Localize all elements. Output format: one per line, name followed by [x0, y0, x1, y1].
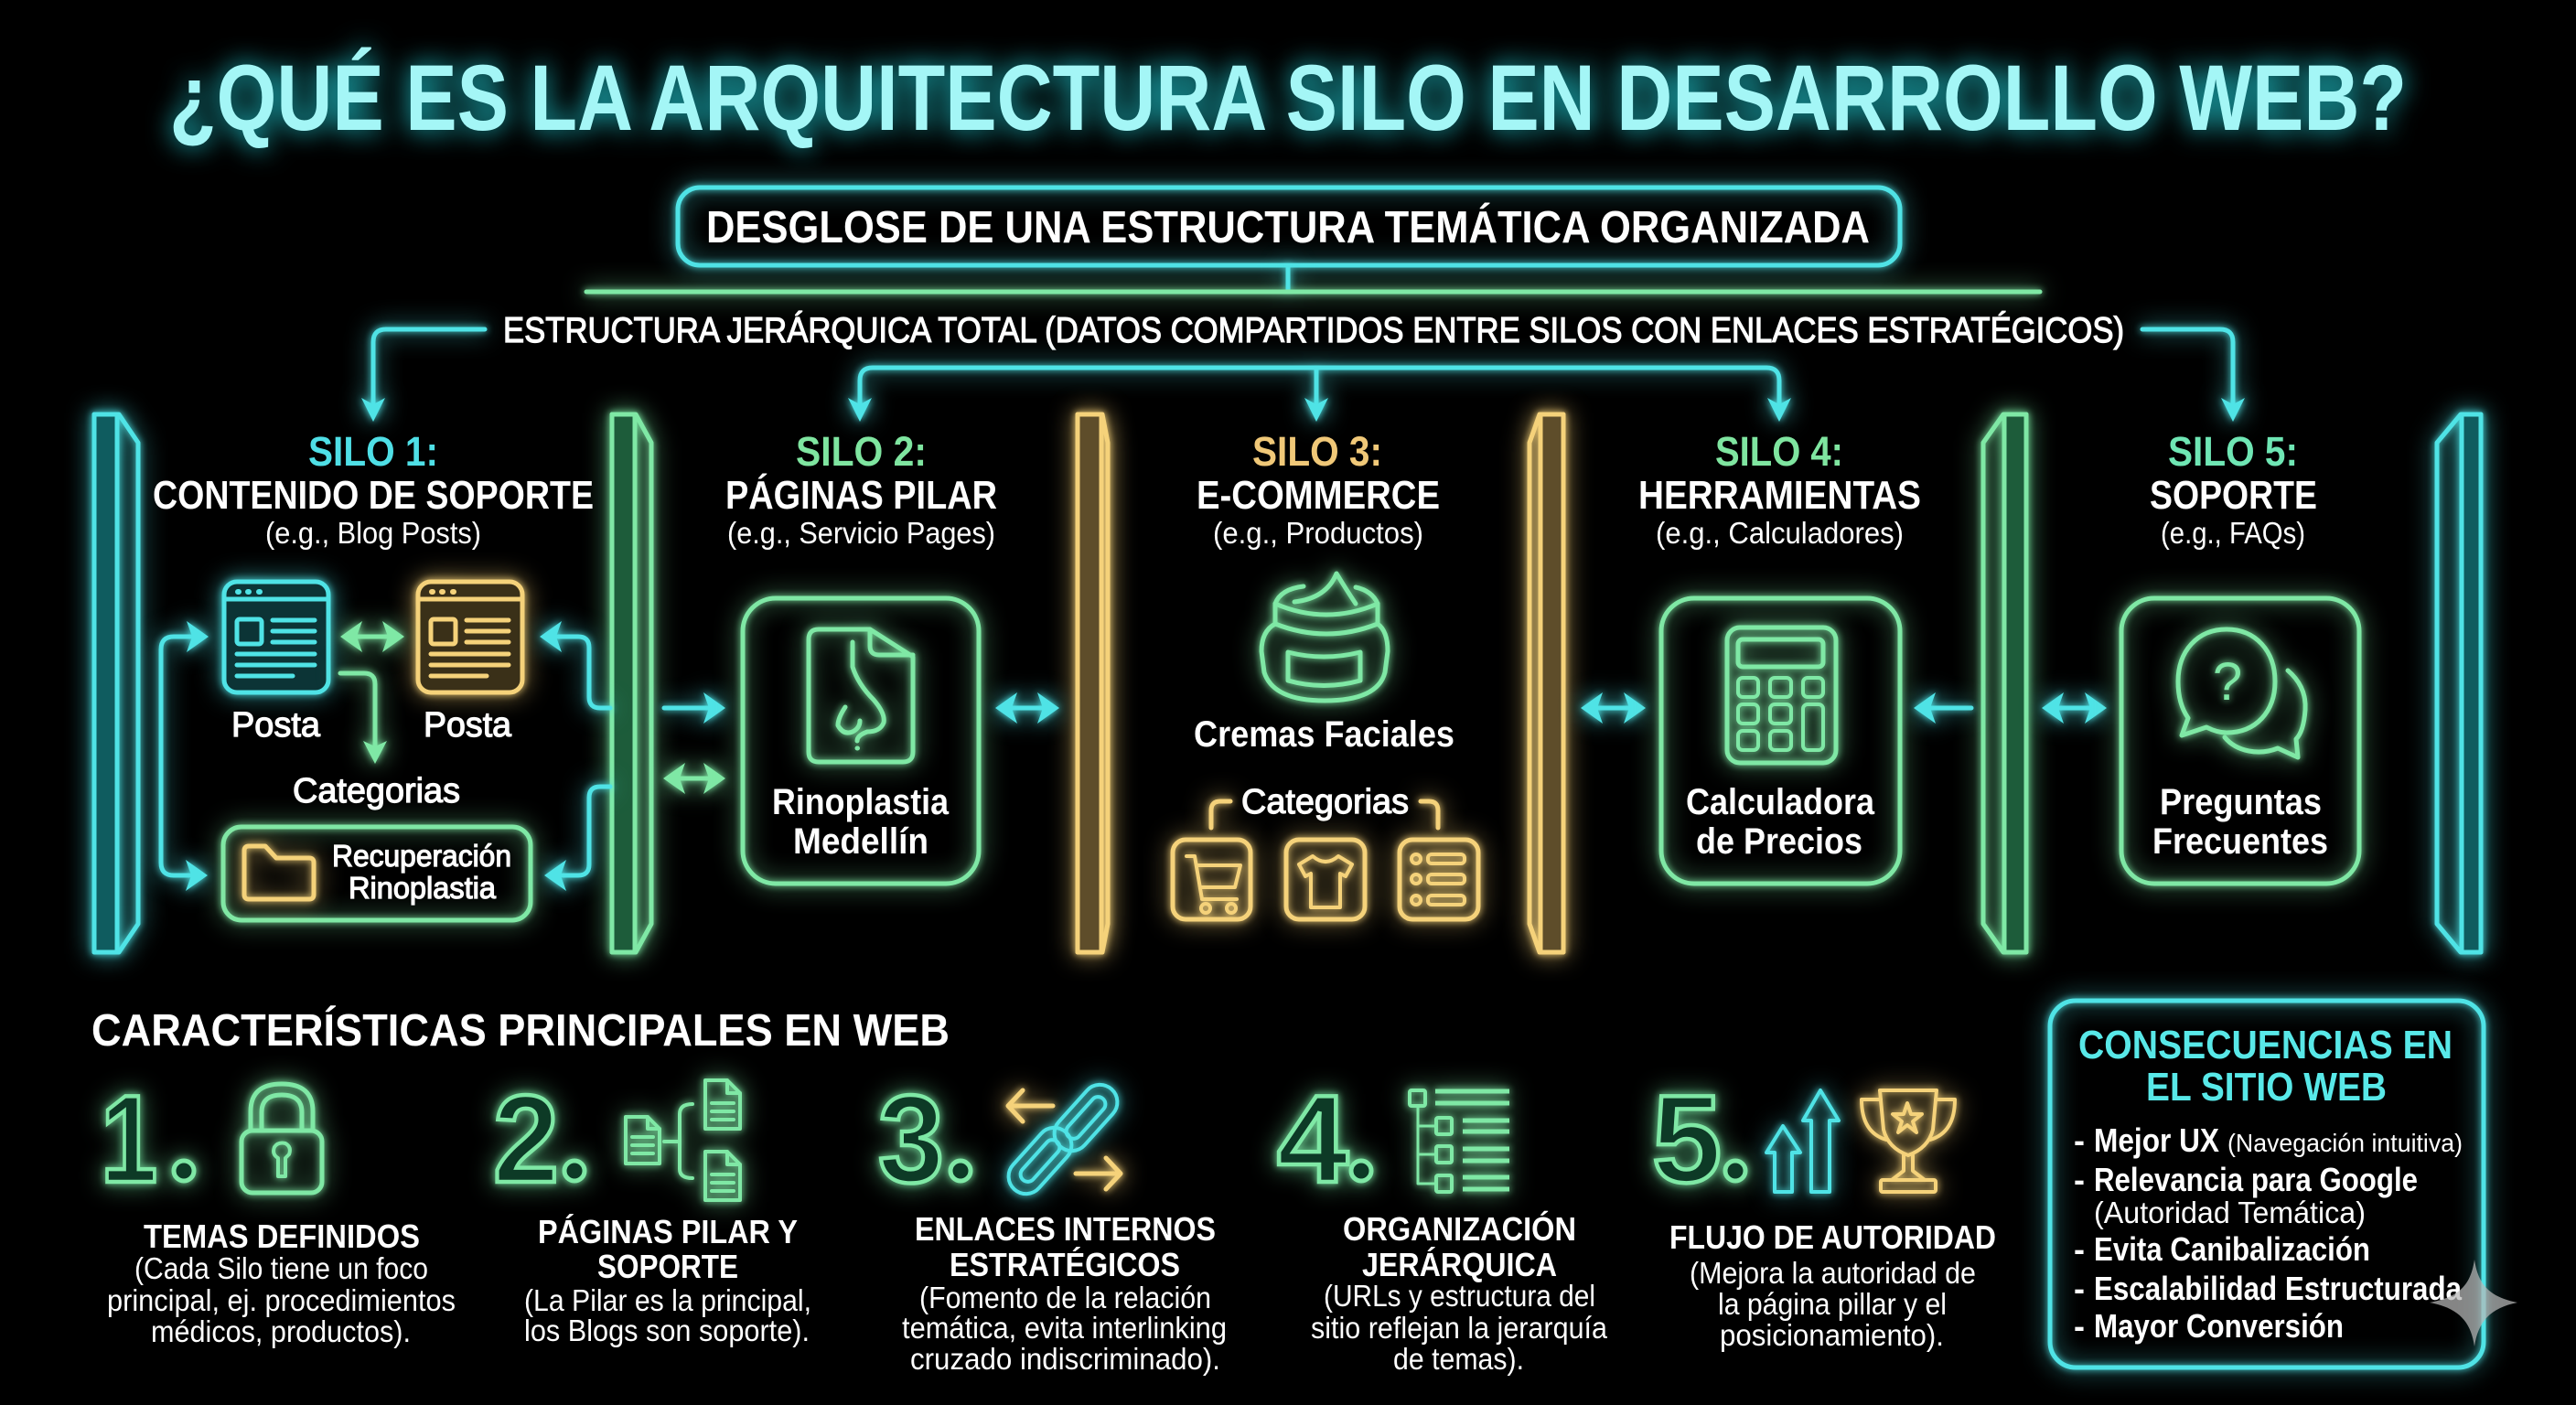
feature 2 — [493, 1069, 811, 1347]
consecuencias list: Escalabilidad Estructurada — [2094, 1270, 2463, 1307]
number 2: 2 — [493, 1069, 559, 1208]
label: Posta left: Posta — [231, 706, 321, 745]
heading: características: CARACTERÍSTICAS PRINCIPALES EN WEB — [91, 1006, 950, 1056]
silo 4 heading — [1638, 428, 1921, 550]
silo 2 heading — [725, 428, 997, 550]
silo 3 heading: (e.g., Productos) — [1213, 516, 1423, 550]
icon: pillar documents — [626, 1080, 740, 1200]
arrow: pillar 5 to calculator — [1914, 692, 1971, 724]
icon: hierarchy list — [1410, 1090, 1509, 1192]
pillar 5 — [1983, 414, 2026, 952]
consecuencias list: Evita Canibalización — [2094, 1230, 2370, 1268]
arrows: top distribution to silos — [361, 329, 2245, 422]
feature 4 text: sitio reflejan la jerarquía — [1311, 1311, 1608, 1345]
panel: silo 5 — [2121, 428, 2359, 884]
panel: silo 4 — [1638, 428, 1921, 884]
feature 3 text — [902, 1210, 1227, 1376]
bracket — [1211, 801, 1438, 828]
icon: question bubbles — [2178, 629, 2305, 757]
card: preguntas frecuentes: Preguntas — [2160, 782, 2322, 822]
silo 4 heading: (e.g., Calculadores) — [1656, 516, 1904, 550]
hierarchy label: ESTRUCTURA JERÁRQUICA TOTAL (DATOS COMPARTIDOS ENTRE SILOS CON ENLACES ESTRATÉGICOS) — [503, 311, 2124, 350]
feature 3 text: (Fomento de la relación — [919, 1281, 1211, 1314]
feature 4 text: ORGANIZACIÓN — [1343, 1209, 1576, 1248]
feature 3 text: cruzado indiscriminado). — [910, 1342, 1220, 1376]
pillar 4 — [1530, 414, 1563, 952]
silo 3 heading — [1197, 428, 1440, 550]
consecuencias list: Mejor UX — [2094, 1121, 2219, 1159]
consecuencias list: - — [2074, 1230, 2085, 1268]
icon: yellow browser post — [418, 582, 522, 692]
icon: nose document — [809, 629, 913, 762]
panel: recuperación rinoplastia: Recuperación — [332, 839, 511, 873]
arrow: post to categories — [340, 673, 387, 764]
icon: lock — [242, 1084, 322, 1193]
silo 2 heading: PÁGINAS PILAR — [725, 472, 997, 518]
number 5: 5 — [1652, 1069, 1722, 1208]
feature 4 text — [1311, 1209, 1608, 1376]
feature 2 text: PÁGINAS PILAR Y — [538, 1213, 798, 1250]
number 1: 1 — [101, 1069, 157, 1208]
silo 5 heading — [2150, 428, 2317, 550]
feature 4 — [1277, 1069, 1608, 1376]
consecuencias list: Mayor Conversión — [2094, 1307, 2344, 1345]
label: Posta right: Posta — [424, 706, 512, 745]
silo 3 heading: SILO 3: — [1252, 428, 1382, 475]
feature 2 text — [524, 1213, 811, 1347]
panel: silo 2 — [725, 428, 997, 884]
silo 3 heading: E-COMMERCE — [1197, 473, 1440, 518]
consecuencias list — [2074, 1121, 2463, 1345]
arrows: pillar 1 to posts and folder — [161, 621, 209, 891]
icon: question bubbles: ? — [2213, 652, 2242, 712]
feature 1 text — [107, 1217, 456, 1348]
consecuencias heading — [2078, 1023, 2453, 1110]
silo 4 heading: SILO 4: — [1715, 428, 1843, 475]
card: Rinoplastia Medellín: Medellín — [793, 821, 928, 862]
arrow: green double between pillar 2 and pillar page — [663, 763, 725, 794]
arrow: silo 2 to pillar 3 — [995, 692, 1059, 724]
feature 3 text: temática, evita interlinking — [902, 1311, 1227, 1345]
pillar 6 — [2437, 414, 2481, 952]
pillar 2 — [612, 414, 651, 952]
arrow: pillar 5 to silo 5 — [2042, 692, 2107, 724]
feature 5 text: (Mejora la autoridad de — [1690, 1256, 1976, 1290]
arrow: pillar 2 to pillar page — [664, 692, 725, 724]
silo 4 heading: HERRAMIENTAS — [1638, 473, 1921, 518]
icon: calculator — [1727, 627, 1836, 763]
icon: shirt — [1286, 840, 1365, 919]
silo 1 heading: (e.g., Blog Posts) — [265, 516, 481, 550]
card: Rinoplastia Medellín: Rinoplastia — [772, 782, 950, 822]
label: Categorias: Categorias — [1241, 783, 1409, 821]
icon: list — [1400, 840, 1478, 919]
pillar 1 — [94, 414, 138, 952]
feature 1 text: (Cada Silo tiene un foco — [134, 1251, 428, 1285]
subtitle box — [678, 188, 1900, 265]
consecuencias list: (Autoridad Temática) — [2094, 1196, 2366, 1229]
feature 5 text: la página pillar y el — [1718, 1287, 1947, 1321]
feature 4 text: de temas). — [1393, 1342, 1524, 1376]
card: calculadora: de Precios — [1696, 821, 1862, 862]
panel: recuperación rinoplastia — [223, 827, 531, 920]
label: Cremas Faciales: Cremas Faciales — [1194, 714, 1454, 755]
card: preguntas frecuentes: Frecuentes — [2152, 821, 2328, 862]
consecuencias heading: EL SITIO WEB — [2146, 1065, 2387, 1110]
icon: folder — [244, 846, 314, 899]
feature 5 text: posicionamiento). — [1720, 1318, 1944, 1352]
consecuencias list: - — [2074, 1270, 2085, 1307]
icon: cart — [1173, 840, 1250, 919]
consecuencias list: - — [2074, 1161, 2085, 1198]
panel: silo 1 — [153, 428, 610, 920]
silo 2 heading: SILO 2: — [796, 428, 927, 475]
number 3: 3 — [878, 1069, 944, 1208]
icon: cream jar — [1261, 574, 1388, 701]
panel: recuperación rinoplastia: Rinoplastia — [349, 871, 497, 905]
icon: sparkle watermark — [2430, 1260, 2517, 1346]
feature 5 text: FLUJO DE AUTORIDAD — [1669, 1218, 1996, 1256]
icon: trophy — [1862, 1090, 1955, 1192]
feature 1 — [101, 1069, 456, 1348]
feature 2 text: SOPORTE — [597, 1248, 738, 1285]
feature 2 text: (La Pilar es la principal, — [524, 1283, 811, 1317]
card: preguntas frecuentes — [2121, 598, 2359, 884]
icon: up arrows — [1766, 1090, 1839, 1192]
feature 3 text: ESTRATÉGICOS — [950, 1246, 1180, 1283]
card: calculadora: Calculadora — [1686, 782, 1875, 822]
connector: box to horizontal rule — [586, 266, 2040, 292]
silo 2 heading: (e.g., Servicio Pages) — [727, 516, 995, 550]
consecuencias list: - — [2074, 1307, 2085, 1345]
feature 2 text: los Blogs son soporte). — [524, 1314, 810, 1347]
label: Categorias: Categorias — [293, 772, 460, 810]
feature 3 — [878, 1069, 1227, 1376]
silo 5 heading: SILO 5: — [2168, 428, 2298, 475]
silo 5 heading: SOPORTE — [2150, 473, 2317, 518]
silo 5 heading: (e.g., FAQs) — [2161, 516, 2305, 550]
consecuencias heading: CONSECUENCIAS EN — [2078, 1023, 2453, 1067]
silo 1 heading: SILO 1: — [308, 428, 438, 475]
icon: chain link with arrows — [1002, 1078, 1124, 1201]
arrows: pillar 2 to posts and folder — [540, 621, 610, 891]
pillar 3 — [1078, 414, 1108, 952]
number 4: 4 — [1277, 1069, 1348, 1208]
feature 1 text: TEMAS DEFINIDOS — [144, 1217, 420, 1255]
consecuencias list: (Navegación intuitiva) — [2227, 1129, 2463, 1157]
feature 1 text: médicos, productos). — [151, 1314, 411, 1348]
consecuencias list: Relevancia para Google — [2094, 1161, 2418, 1198]
silo 1 heading: CONTENIDO DE SOPORTE — [153, 473, 594, 518]
subtitle box: DESGLOSE DE UNA ESTRUCTURA TEMÁTICA ORGANIZADA — [706, 203, 1870, 252]
arrow: pillar 4 to silo 4 — [1581, 692, 1646, 724]
panel: consecuencias — [2050, 1001, 2484, 1367]
feature 5 — [1652, 1069, 1996, 1352]
card: Rinoplastia Medellín — [743, 598, 979, 884]
card: calculadora — [1661, 598, 1900, 884]
feature 4 text: (URLs y estructura del — [1324, 1279, 1595, 1313]
arrow: between posts — [340, 621, 404, 652]
feature 1 text: principal, ej. procedimientos — [107, 1283, 456, 1317]
consecuencias list: - — [2074, 1121, 2085, 1159]
panel: silo 3 — [1173, 428, 1478, 919]
feature 3 text: ENLACES INTERNOS — [915, 1210, 1216, 1248]
silo 1 heading — [153, 428, 594, 550]
icon: cyan browser post — [224, 582, 328, 692]
feature 4 text: JERÁRQUICA — [1362, 1246, 1557, 1283]
feature 5 text — [1669, 1218, 1996, 1352]
